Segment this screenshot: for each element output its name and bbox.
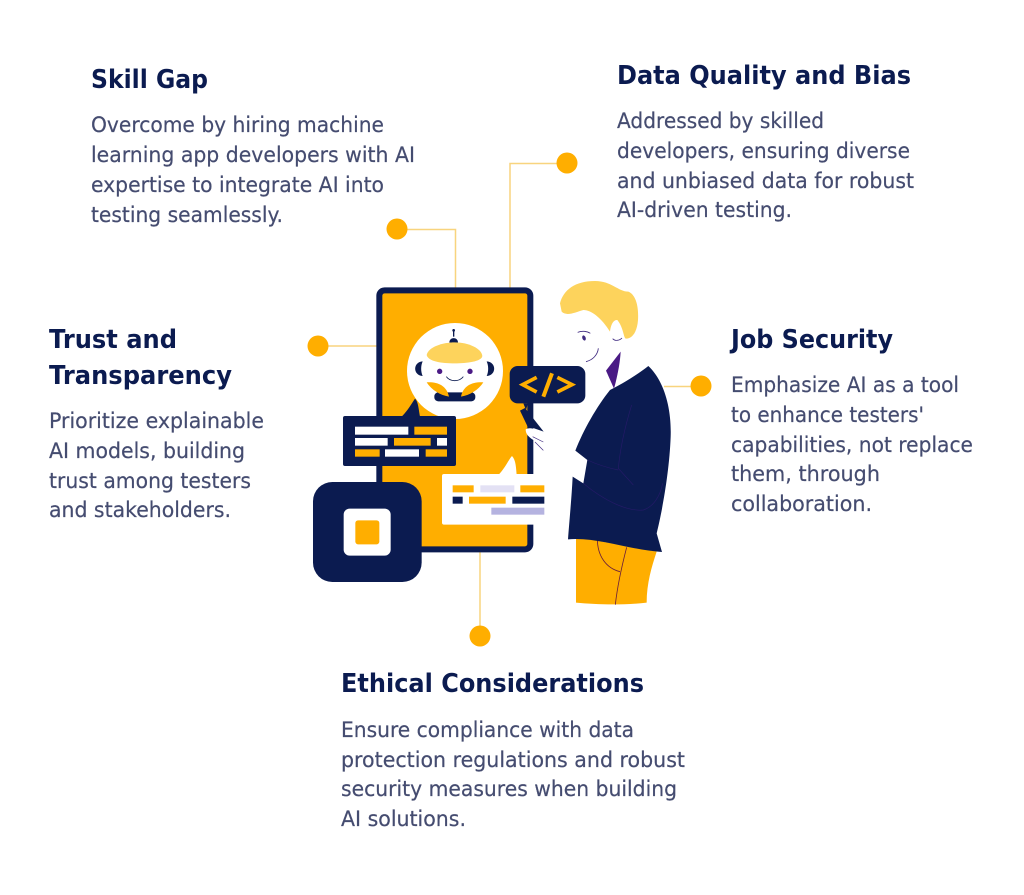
trousers [576,537,657,604]
white chat bubble [442,456,552,525]
text: ethical considerations [341,669,685,831]
text: skill gap [91,65,415,227]
text: job security: capabilities, not replace [731,433,973,457]
connector: data quality [510,152,578,289]
text: job security: to enhance testers' [731,403,924,427]
text: data quality and bias: AI-driven testing. [617,198,792,222]
text: data quality and bias: and unbiased data for robust [617,169,914,193]
hair [560,281,638,339]
text: skill gap: Skill Gap [91,65,208,95]
robot head [407,323,503,419]
text: ethical considerations: Ensure compliance with data [341,718,634,742]
text: trust and transparency: AI models, building [49,439,245,463]
phone [379,290,530,549]
text: trust and transparency: Prioritize explainable [49,409,264,433]
hand and code bubble [510,366,585,453]
text: skill gap: testing seamlessly. [91,203,283,227]
text: ethical considerations: Ethical Considerations [341,669,644,699]
jacket [568,366,671,552]
connector: trust [308,336,377,356]
text: skill gap: expertise to integrate AI into [91,173,384,197]
text: job security: them, through [731,462,880,486]
app icon [313,482,422,582]
illustration: person [560,281,671,605]
text: trust and transparency: Transparency [49,361,232,391]
face details [578,331,622,362]
text: data quality and bias: Data Quality and Bias [617,61,911,91]
text: trust and transparency: Trust and [49,325,177,355]
text: ethical considerations: AI solutions. [341,807,466,831]
text: job security [729,325,973,516]
connector: job security [664,376,712,396]
text: trust and transparency [49,325,264,522]
text: data quality and bias: developers, ensuring diverse [617,139,910,163]
hand [520,408,544,432]
text: trust and transparency: and stakeholders. [49,498,231,522]
text: data quality and bias [617,61,914,222]
illustration: phone and robot [313,290,552,582]
text: ethical considerations: security measures when building [341,777,677,801]
text: skill gap: learning app developers with AI [91,143,415,167]
collar [606,352,621,389]
text: job security: Job Security [729,325,893,355]
text: ethical considerations: protection regulations and robust [341,748,685,772]
text: job security: collaboration. [731,492,872,516]
text: trust and transparency: trust among testers [49,469,251,493]
text: skill gap: Overcome by hiring machine [91,113,384,137]
code bubble [523,403,528,410]
text: data quality and bias: Addressed by skilled [617,109,824,133]
navy chat bubble [343,399,456,466]
connector: skill gap [386,218,456,289]
connector: ethical [470,551,490,646]
text: job security: Emphasize AI as a tool [731,373,959,397]
